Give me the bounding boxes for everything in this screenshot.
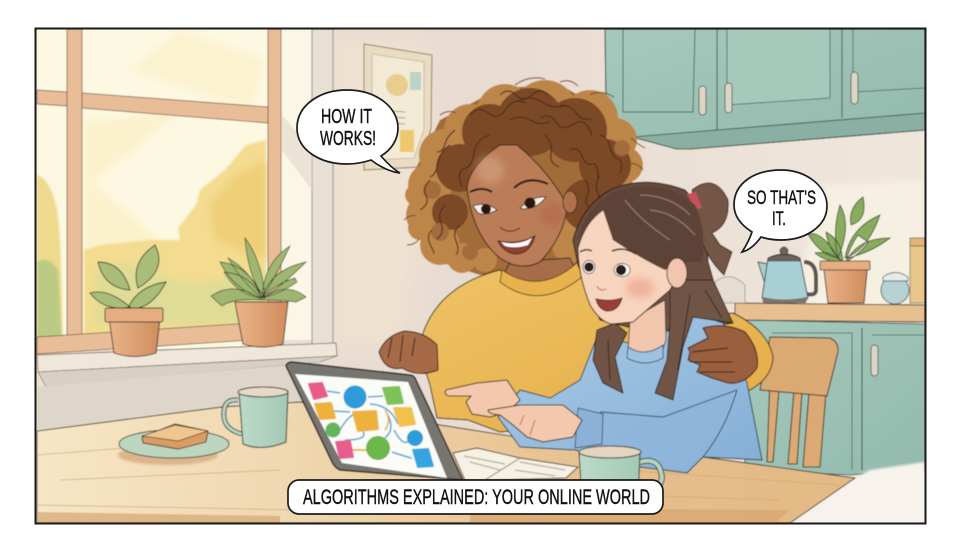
girl: blue sweater [498,313,762,473]
girl: nose [597,286,606,290]
plate with toast [118,424,229,465]
girl: cheek blush [626,278,654,298]
girl: bun [692,183,732,275]
window sill [37,343,345,429]
girl: face [578,210,685,324]
plant: left pot on sill [90,245,166,356]
mug near girl [579,446,662,505]
title banner [288,480,663,514]
girl: neck [628,300,666,357]
woman: eyes and brows [470,180,548,214]
woman: forehead light [476,156,504,184]
woman: cheek shading [542,206,566,224]
app icons [309,383,433,467]
wall light patch [804,184,922,304]
plant: kitchen pot [808,197,890,303]
speech bubble: so that's it [734,170,827,252]
woman: nose [500,227,520,231]
jars [881,238,925,304]
woman: face [467,145,567,266]
woman: ear [563,191,577,213]
girl: eyes and brows [580,249,636,276]
counter and lower cabinets [735,303,925,523]
tablet [286,362,463,480]
title text: ALGORITHMS EXPLAINED: YOUR ONLINE WORLD [303,486,650,509]
window reveal [282,29,312,340]
woman: smile [498,236,535,254]
girl: sleeve shading [600,390,737,470]
woman [404,78,773,432]
girl: sweater collar [627,345,663,363]
kettle [758,247,816,303]
woman: sweater collar [500,262,583,296]
girl: open smile [596,298,622,311]
wall poster [364,44,432,170]
wall glow near window [333,40,430,345]
window with garden view [37,29,282,354]
mug on table [224,387,288,448]
table [37,402,855,523]
woman's hand on girl's shoulder [688,326,758,383]
network arrows [327,391,412,458]
girl: scrunchie [687,192,702,209]
bubble text: so that's it: SO THAT'S [747,187,816,209]
woman: neck [504,257,574,282]
girl: fringe [578,186,703,270]
tablet screen [295,374,447,478]
upper kitchen cabinets [605,29,925,149]
girl: sweater cuff [575,408,603,448]
girl [498,182,762,473]
girl: left hair strand [593,323,627,393]
woman's hand pointing at tablet [379,331,438,374]
woman: yellow sweater [422,262,773,432]
girl: ear [667,258,687,288]
plant: right pot on sill [211,238,306,347]
window frame [37,29,282,354]
bubble text: how it works: WORKS! [320,128,376,150]
speech bubble: how it works [297,90,400,173]
wooden chair [760,337,838,467]
girl: right hair strand [655,280,733,400]
bubble text: how it works: HOW IT [321,106,372,128]
open book [453,448,578,480]
mixer behind girl [715,277,745,303]
girl's pointing hands [445,380,582,442]
bubble text: so that's it: IT. [772,208,786,230]
girl: hair back [573,182,733,330]
woman: hair [404,78,645,275]
